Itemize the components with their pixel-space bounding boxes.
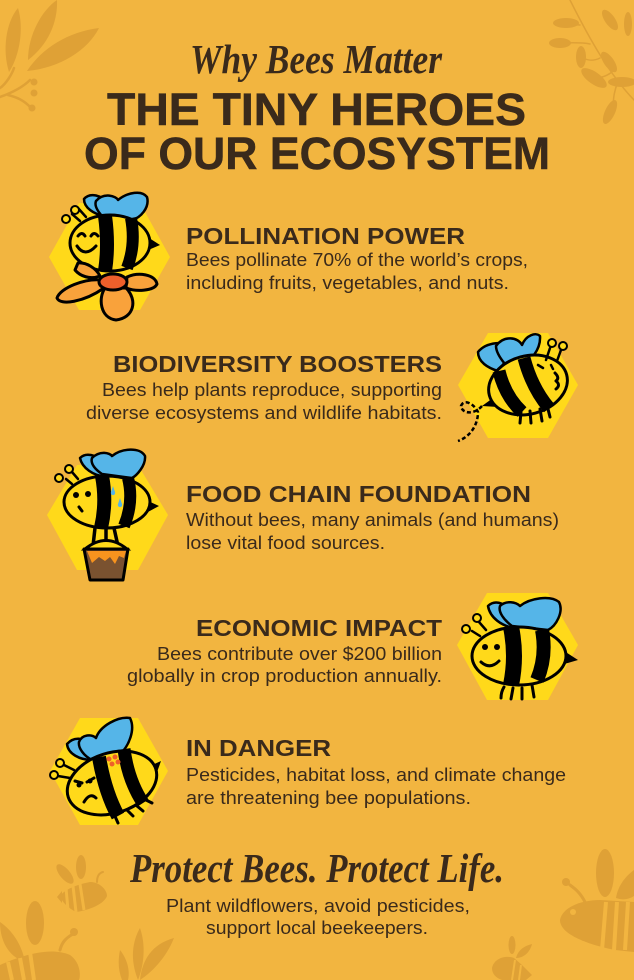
text block: food chain foundation [186, 481, 559, 553]
text block: biodiversity boosters: BIODIVERSITY BOOSTERS [113, 351, 442, 377]
panel: biodiversity boosters icon [458, 333, 578, 441]
decoration: top-left leaves [0, 0, 99, 112]
decoration: footer right bees [492, 849, 634, 980]
text block: call to action [166, 896, 470, 938]
panel: in danger icon [50, 718, 168, 826]
text block: in danger [186, 735, 566, 808]
text block: biodiversity boosters: diverse ecosystems and wildlife habitats. [86, 403, 442, 423]
text block: biodiversity boosters [86, 351, 442, 423]
text block: call to action: Plant wildflowers, avoid pesticides, [166, 896, 470, 916]
text block: in danger: Pesticides, habitat loss, and climate change [186, 765, 566, 785]
text block: economic impact: ECONOMIC IMPACT [196, 615, 442, 641]
text block: pollination power: including fruits, vegetables, and nuts. [186, 273, 509, 293]
text block: pollination power: Bees pollinate 70% of the world’s crops, [186, 250, 528, 270]
text block: food chain foundation: lose vital food sources. [186, 533, 385, 553]
decoration: top-right sprig [549, 0, 634, 126]
text block: food chain foundation: FOOD CHAIN FOUNDATION [186, 481, 531, 507]
text block: food chain foundation: Without bees, many animals (and humans) [186, 510, 559, 530]
callout: script slogan: Protect Bees. Protect Life. [129, 845, 504, 891]
decoration: footer left bees and leaves [0, 855, 174, 980]
panel: economic impact icon [457, 593, 578, 700]
text block: call to action: support local beekeepers. [206, 918, 428, 938]
text block: biodiversity boosters: Bees help plants reproduce, supporting [102, 380, 442, 400]
text block: economic impact: globally in crop production annually. [127, 666, 442, 686]
text block: economic impact [127, 615, 442, 686]
title: main heading: OF OUR ECOSYSTEM [84, 128, 550, 179]
text block: in danger: are threatening bee populations. [186, 788, 471, 808]
text block: in danger: IN DANGER [186, 735, 331, 761]
text block: economic impact: Bees contribute over $200 billion [157, 644, 442, 664]
panel: food chain foundation icon [47, 450, 168, 580]
title: main heading [84, 84, 550, 179]
text block: pollination power [186, 223, 528, 293]
title: main heading: THE TINY HEROES [107, 84, 526, 135]
title: script heading: Why Bees Matter [190, 36, 443, 82]
panel: pollination power icon [49, 193, 170, 320]
text block: pollination power: POLLINATION POWER [186, 223, 465, 249]
